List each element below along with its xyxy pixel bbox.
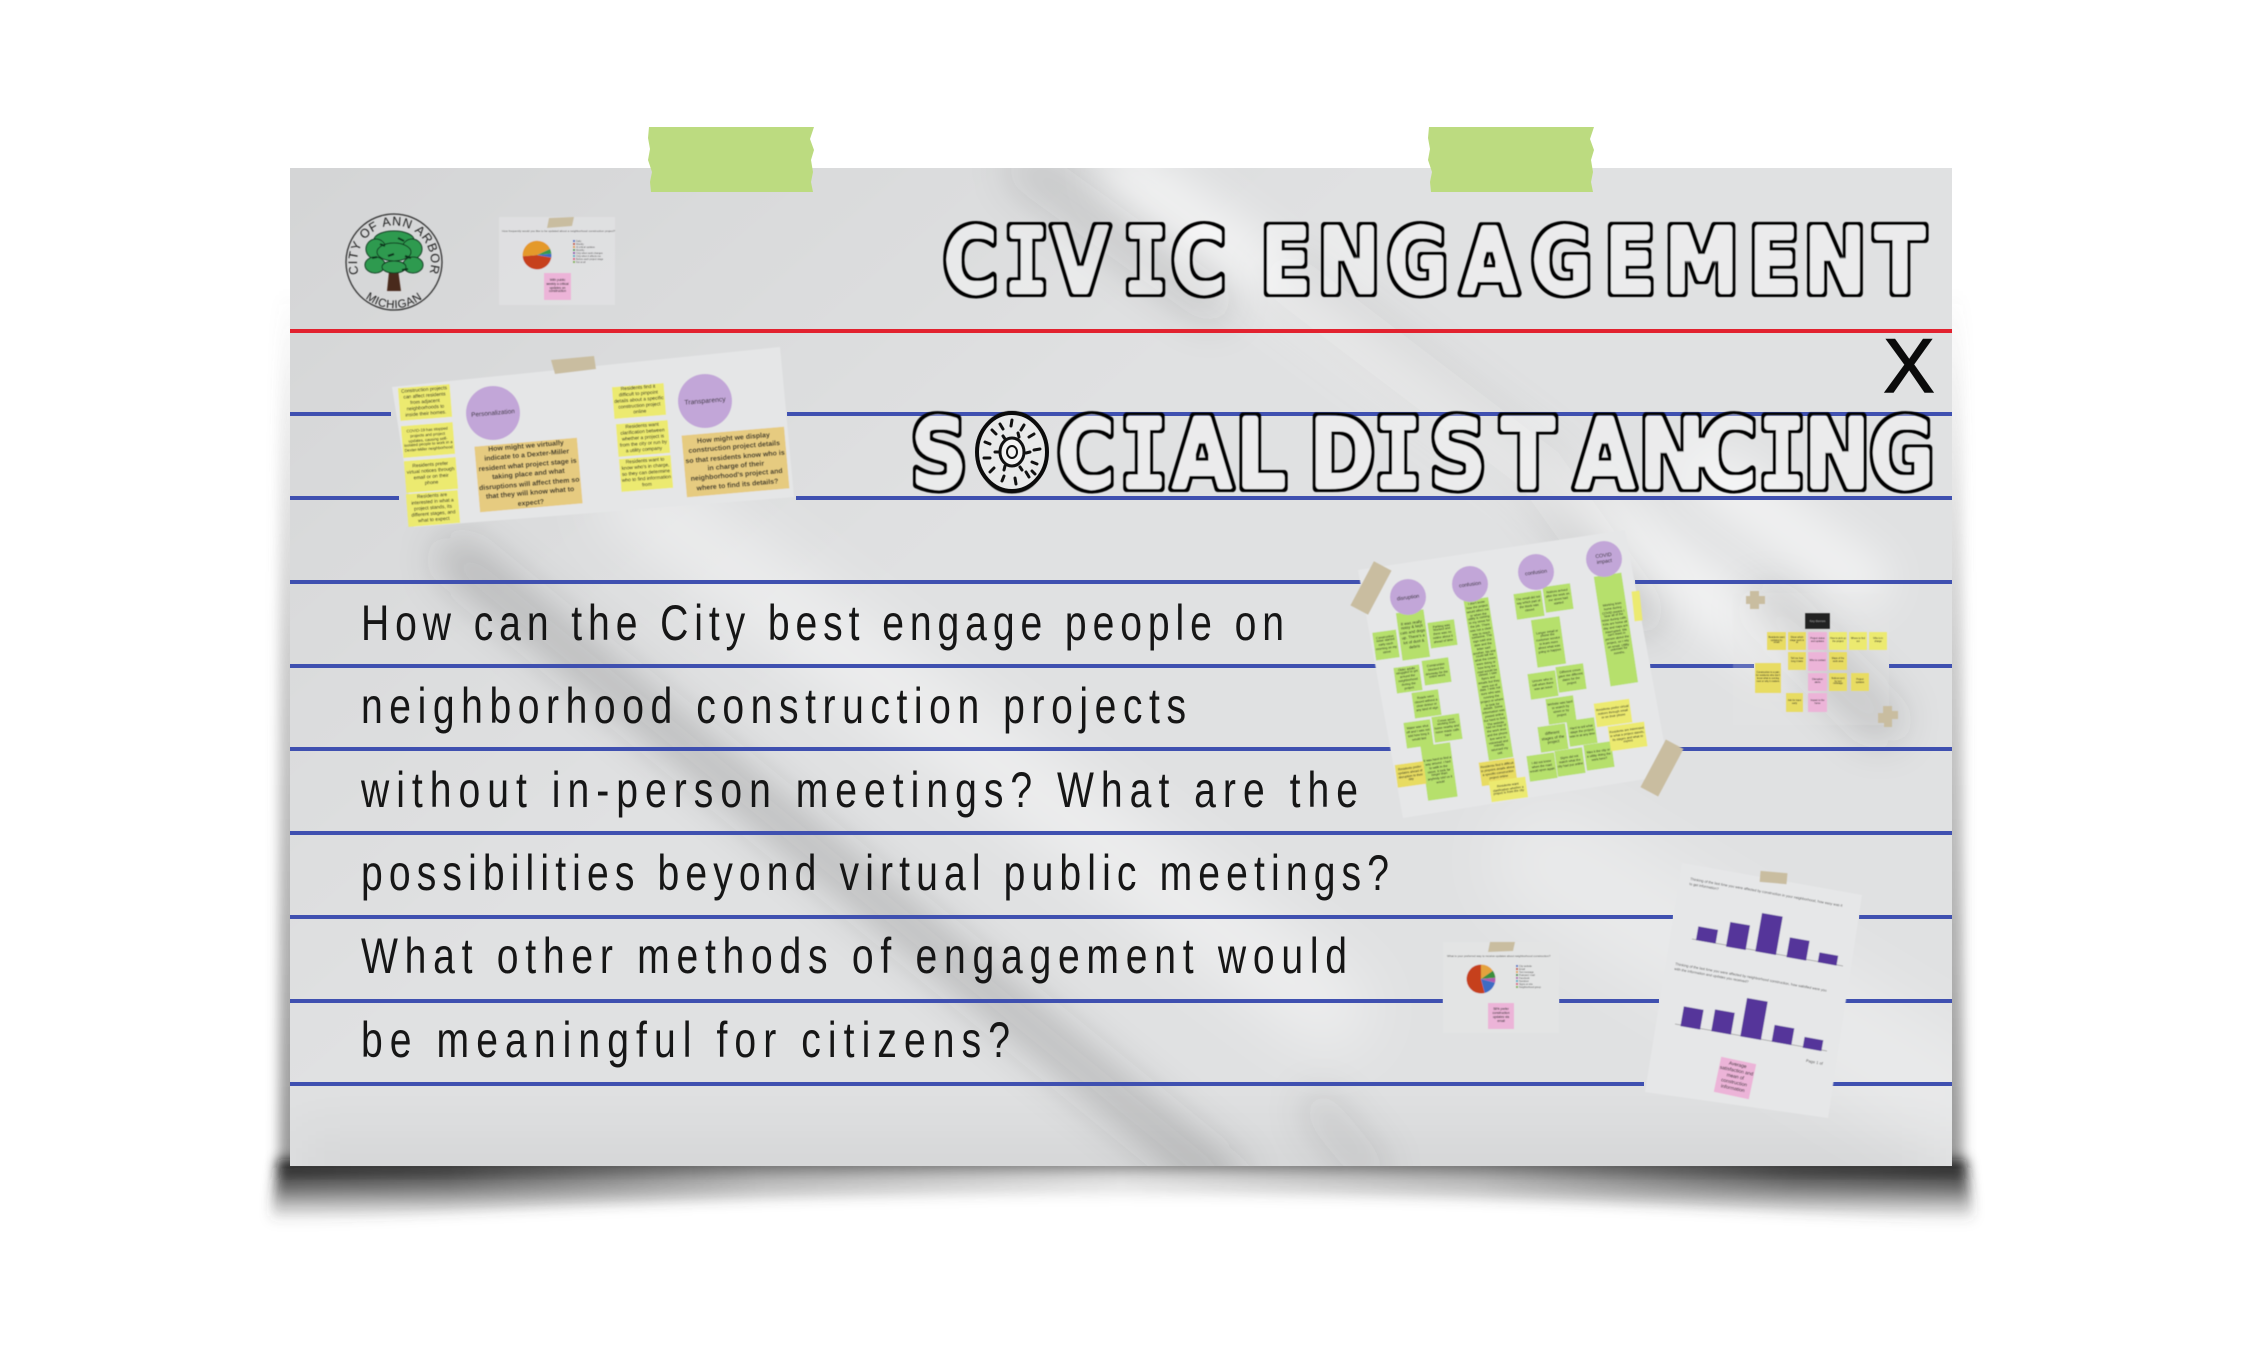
- column: disruption: Crews were working from home nearby and noise made calls hard: [1434, 716, 1459, 737]
- legend: Daily: [576, 240, 582, 243]
- legend: City website: [1519, 965, 1533, 968]
- ruled blue lines: [290, 414, 1952, 1084]
- tape: [1760, 871, 1787, 884]
- panel: personalization and transparency notes: Residents prefer virtual notices through email or on their phone: [407, 462, 455, 487]
- body question text: What other methods of engagement would: [361, 927, 1347, 984]
- purple circle: Personalization: [466, 386, 520, 440]
- purple circle: confusion 2: [1518, 554, 1554, 590]
- panel: personalization and transparency notes: [392, 347, 794, 527]
- panel: personalization and transparency notes: Residents want to know who's in charge, so they can determine who to find information from: [621, 457, 671, 488]
- body question text: neighborhood construction projects: [361, 677, 1186, 734]
- body question text: be meaningful for citizens?: [361, 1011, 1010, 1068]
- column: COVID impact: Residents prefer virtual notices through email or on their phone: [1596, 704, 1629, 720]
- tape cross: [1878, 706, 1898, 727]
- icon: donut as the letter O: [977, 413, 1047, 491]
- purple circle: Personalization: Personalization: [471, 408, 516, 419]
- panel: personalization and transparency notes: Residents want clarification between whether a project is from the city or run by a utility company: [620, 422, 667, 454]
- tape: [547, 217, 574, 228]
- panel: sticky note grid: Project status and updates: [1810, 637, 1825, 643]
- purple circle: COVID impact: [1586, 541, 1622, 577]
- column: disruption: It was really noisy & kept cats and dogs up. There's a lot of dust & debris: [1400, 618, 1425, 649]
- how might we note: personalization: How might we virtually indicate to a Dexter-Miller resident what project stage is taking place and what disruptions will affect them so that they will know what to expect?: [478, 440, 580, 508]
- bar chart: ease of getting information: Thinking of the last time you were affected by construction in your neighborhood, how easy was it: [1690, 877, 1843, 908]
- panel: sticky note grid: Construction is a pain for residents who don't know what is coming next or why it matters: [1756, 671, 1780, 683]
- column: confusion 2: The email did not say which part of the block was closed: [1516, 595, 1541, 612]
- title: X: X: [1884, 324, 1934, 409]
- purple circle: confusion 2: confusion: [1525, 568, 1548, 578]
- purple circle: Transparency: Transparency: [684, 396, 727, 407]
- panel: email pie chart: [1443, 942, 1559, 1033]
- panel: sticky note grid: [1733, 591, 1898, 727]
- column: confusion 2: Unsure who to call when there was an issue: [1532, 677, 1554, 691]
- body question text: without in-person meetings? What are the: [360, 761, 1358, 818]
- legend: Only when work changes: [576, 252, 604, 255]
- legend: Email: [1519, 968, 1525, 971]
- pink note: 58% prefer construction updates via email: [1492, 1007, 1510, 1023]
- panel: sticky note grid: Project updates: [1856, 678, 1864, 684]
- legend: Postcard / mail: [1519, 974, 1535, 977]
- legend: Neighborhood group: [1519, 986, 1541, 989]
- column: COVID impact: Residents are interested in what a project stands, its stages and what to expect: [1609, 726, 1644, 744]
- panel: sticky note grid: Impact to the home: [1811, 699, 1824, 704]
- panel: sticky note grid: Who is in charge: [1873, 637, 1883, 643]
- panel: personalization and transparency notes: COVID-19 has stopped projects and project updates, causing self-isolated people to work in a Dexter-Miller neighborhood: [404, 425, 453, 453]
- bar chart: ease of getting information: [1689, 877, 1843, 966]
- column: confusion 2: I did not know when the road would open again: [1530, 759, 1555, 774]
- purple circle: COVID impact: COVID: [1595, 552, 1612, 560]
- logo: City of Ann Arbor seal: [344, 212, 444, 312]
- left green tape: [648, 127, 814, 192]
- purple circle: confusion: [1452, 566, 1488, 602]
- tape: [1350, 561, 1392, 615]
- pink note: Average satisfaction and mean of construction information: [1719, 1061, 1753, 1094]
- legend: Text message: [1519, 971, 1534, 974]
- column: COVID impact: Working from home during COVID means I hear all of the noise during calls. Kids are home all day and naps are interrupted. We can't meet in person about the project, so I rely on email. Utility unknown for months.: [1601, 601, 1629, 656]
- bar chart: satisfaction with information: with the information and updates you received?: [1674, 967, 1749, 984]
- pie chart: [1467, 964, 1495, 994]
- column: disruption: [1372, 579, 1463, 801]
- right green tape: [1428, 127, 1594, 192]
- legend: Not at all: [576, 261, 586, 264]
- chart title: How frequently would you like to be updated about a neighborhood construction project?: [502, 229, 616, 233]
- body question text: [360, 594, 1389, 1068]
- panel: satisfaction bar charts: [1645, 863, 1862, 1118]
- body question text: possibilities beyond virtual public meetings?: [361, 844, 1389, 901]
- dark header box: Key themes: [1810, 619, 1826, 623]
- panel: sticky note grid: Maps of the work area: [1832, 657, 1844, 663]
- tape: [1488, 942, 1515, 952]
- column: confusion 2: different stages of the project: [1541, 729, 1565, 745]
- curved bottom shadow: [270, 1160, 1974, 1224]
- bar chart: satisfaction with information: [1674, 962, 1827, 1051]
- dark header box: [1805, 613, 1830, 629]
- legend: Signs on site: [1519, 983, 1533, 986]
- purple circle: disruption: disruption: [1397, 593, 1420, 603]
- pink note: With public weekly a critical updates on construction: [546, 278, 569, 293]
- panel: sticky note grid: Ask for input early: [1788, 699, 1801, 704]
- bar chart: satisfaction with information: Thinking of the last time you were affected by neighborhood construction, how satisfied were you: [1675, 962, 1827, 993]
- column: disruption: Older adults struggled to get around the neighborhood during the project: [1396, 666, 1418, 690]
- legend: Nextdoor: [1519, 980, 1529, 983]
- panel: sticky note grid: Notices sent by text message: [1831, 677, 1845, 685]
- purple circle: Transparency: [678, 374, 732, 428]
- legend: Only when it affects me: [576, 255, 601, 258]
- logo: City of Ann Arbor seal: CITY OF ANN ARBOR: [348, 216, 440, 275]
- column: disruption: It was hard to find a way around. I had to walk in the street. It took far longer than anybody told us it would: [1423, 755, 1453, 784]
- paper side shadow: [279, 290, 1963, 1170]
- column: confusion 2: Notices arrived after the work on our street had started: [1546, 588, 1570, 605]
- panel: sticky note grid: Where to find out: [1851, 637, 1865, 643]
- panel: personalization and transparency notes: Residents find it difficult to pinpoint details about a specific construction project online: [614, 385, 664, 415]
- column: confusion 2: Was it the city or a utility doing the work here?: [1586, 748, 1611, 762]
- panel: small pie chart, top: [499, 217, 616, 305]
- legend: Facebook: [1519, 977, 1530, 980]
- panel: sticky note grid: Residents want updates by email: [1768, 636, 1785, 644]
- column: disruption: Roads were closed without a clear detour or any kind of sign: [1415, 694, 1438, 712]
- column: confusion: Residents want clarification whether a project is from the city: [1493, 781, 1524, 796]
- tape: [1640, 739, 1684, 797]
- column: confusion 2: Hard to tell what stage the project was in at any time: [1569, 724, 1595, 739]
- legend: Weekly: [576, 243, 585, 246]
- logo: City of Ann Arbor seal: MICHIGAN: [366, 292, 422, 309]
- panel: personalization and transparency notes: Residents are interested in what a project stands, its different stages, and what to expect: [411, 492, 456, 524]
- column: confusion: [1452, 566, 1528, 802]
- panel: sticky note grid: Tell me how long it lasts: [1791, 657, 1803, 663]
- chart title: What is your preferred way to receive updates about neighborhood construction?: [1447, 954, 1551, 958]
- panel: sticky note grid: How to pick up the project: [1830, 637, 1846, 643]
- pie chart: [523, 241, 551, 269]
- tape: [551, 356, 596, 374]
- paper sheet with wrinkles: [290, 168, 1952, 1180]
- ruled red margin line: [290, 329, 1952, 333]
- legend: At critical updates: [576, 246, 596, 249]
- panel: sticky note grid: Disruption alerts: [1812, 678, 1823, 684]
- panel: sticky note grid: Show which stage work is at: [1790, 636, 1804, 644]
- column: confusion 2: [1513, 554, 1615, 782]
- column: disruption: Construction blocked the driveway for the entire week: [1425, 662, 1448, 679]
- panel: sticky note grid: Who to contact: [1810, 659, 1825, 662]
- column: confusion: I don't know how the project would affect me or when the utility is coming to my street for the job. There was not a clear way to reach someone. The sign said one date and the letter said another. No one could tell me what the crews were doing or how long the road would be closed. I saw flyers and emails but they were out of date. I was not sure who was running the project or where to look for details. Some information was posted online but hard to find. The website had no map of the work area and the phone line went to voicemail and nobody returned my call.: [1466, 600, 1508, 755]
- panel: affinity diagram: [1350, 530, 1684, 818]
- how might we note: transparency: How might we display construction project details so that residents know who is in charge of their neighborhood's project and where to find its details?: [685, 432, 785, 492]
- column: confusion: Residents find it difficult to pinpoint details about a specific construction project online: [1480, 761, 1515, 780]
- legend: Monthly: [576, 249, 585, 252]
- title: Social Distancing: SOCIAL DISTANCING: [910, 398, 1935, 512]
- column: confusion 2: Different crews gave me different dates for the project: [1558, 668, 1583, 685]
- column: confusion 2: Longer email or phone the customer service to learn more about what was going to happen: [1536, 628, 1561, 654]
- column: confusion 2: Signs did not match what the city had put online: [1557, 754, 1583, 769]
- column: confusion 2: Website was hard to search by street or by project: [1547, 700, 1573, 717]
- column: disruption: Parking was blocked and there was no notice about it ahead of time: [1432, 622, 1453, 644]
- purple circle: confusion: confusion: [1459, 580, 1482, 590]
- purple circle: COVID impact: impact: [1596, 558, 1613, 566]
- body question text: How can the City best engage people on: [361, 594, 1284, 651]
- bar chart: ease of getting information: to get information?: [1689, 882, 1719, 891]
- column: disruption: Residents prefer updates ahead of disruption to their day: [1398, 764, 1423, 782]
- column: COVID impact: [1586, 541, 1648, 751]
- legend: [1516, 965, 1541, 989]
- tape cross: [1746, 591, 1765, 609]
- page marker: Page 1 of: [1806, 1058, 1824, 1066]
- column: disruption: Construction noise started early each morning on my street: [1376, 633, 1397, 654]
- legend: [573, 240, 604, 264]
- purple circle: disruption: [1390, 579, 1426, 615]
- column: disruption: Water was shut off and I was not told how long it would last: [1406, 724, 1430, 742]
- legend: Before each project stage: [576, 258, 604, 261]
- title: Civic Engagement: CIVIC ENGAGEMENT: [943, 208, 1926, 315]
- panel: personalization and transparency notes: Construction projects can affect residents from adjacent neighborhoods to inside their homes.: [401, 386, 447, 418]
